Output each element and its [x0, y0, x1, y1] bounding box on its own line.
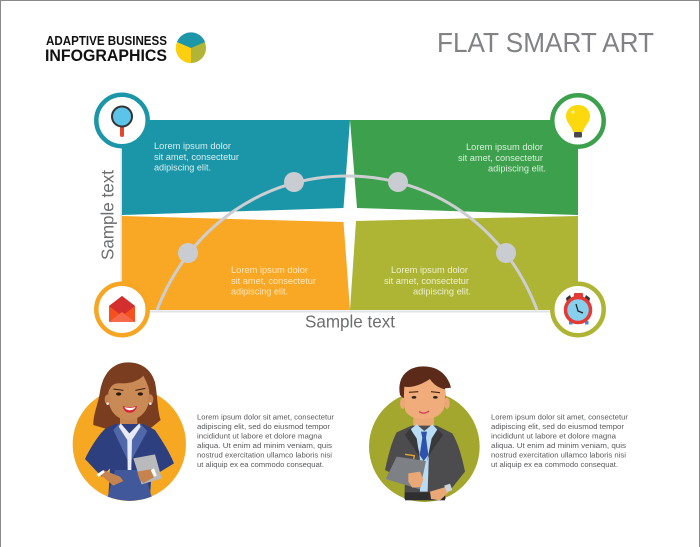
skirt: [108, 470, 152, 501]
text: teal quadrant: adipiscing elit.: [154, 162, 211, 172]
text: businesswoman paragraph: incididunt ut labore et dolore magna: [197, 432, 323, 440]
lapels: [113, 423, 128, 462]
hand on hip: [100, 470, 123, 486]
logo: adaptive business infographics: [45, 32, 206, 65]
text: businessman paragraph: ut aliquip ex ea commodo consequat.: [491, 460, 618, 469]
tie: [420, 432, 428, 461]
text: businessman paragraph: nostrud exercitation ullamco laboris nisi: [491, 450, 626, 460]
text: businesswoman paragraph: nostrud exercitation ullamco laboris nisi: [197, 450, 332, 460]
belt: [405, 492, 445, 500]
text: green quadrant: [458, 142, 546, 174]
text: olive quadrant: sit amet, consectetur: [384, 276, 469, 286]
text: olive quadrant: adipiscing elit.: [413, 286, 471, 296]
text: olive quadrant: [384, 265, 471, 296]
text: businesswoman paragraph: ut aliquip ex ea commodo consequat.: [197, 460, 324, 469]
text: green quadrant: Lorem ipsum dolor: [466, 142, 543, 152]
logo text: ADAPTIVE BUSINESS: [46, 34, 167, 48]
icon: magnifying glass: [96, 95, 148, 146]
text: orange quadrant: Lorem ipsum dolor: [231, 265, 308, 275]
text: businessman paragraph: adipiscing elit, sed do eiusmod tempor: [491, 422, 624, 431]
logo pie icon: [176, 32, 206, 63]
hand on tablet: [137, 469, 155, 483]
icon: alarm clock: [552, 284, 604, 335]
text: teal quadrant: [154, 141, 239, 172]
text: businesswoman paragraph: Lorem ipsum dolor sit amet, consectetur: [197, 412, 334, 422]
eyes: [116, 392, 121, 396]
text: teal quadrant: sit amet, consectetur: [154, 152, 239, 162]
panel: teal quadrant: [122, 120, 350, 215]
text: green quadrant: sit amet, consectetur: [458, 153, 543, 163]
icon: envelope: [96, 284, 148, 335]
text: businesswoman paragraph: aliqua. Ut enim ad minim veniam, quis: [197, 441, 332, 450]
hair: [93, 362, 161, 430]
face: [404, 379, 445, 419]
shirt: [119, 423, 141, 470]
text: teal quadrant: Lorem ipsum dolor: [154, 141, 231, 151]
tablet: [133, 454, 162, 484]
neck: [120, 412, 137, 437]
panel: green quadrant: [350, 120, 578, 215]
text: businessman paragraph: [491, 412, 628, 469]
text: businessman paragraph: Lorem ipsum dolor sit amet, consectetur: [491, 412, 628, 422]
title: FLAT SMART ART: [437, 27, 654, 58]
text: olive quadrant: Lorem ipsum dolor: [391, 265, 468, 275]
axis label: vertical: Sample text: [98, 170, 118, 260]
panel: olive quadrant: [350, 216, 578, 310]
text: businessman paragraph: aliqua. Ut enim ad minim veniam, quis: [491, 441, 626, 450]
hand on hip and watch: [430, 487, 448, 500]
jacket: [85, 424, 174, 497]
text: businessman paragraph: incididunt ut labore et dolore magna: [491, 432, 617, 440]
text: orange quadrant: adipiscing elit.: [231, 286, 288, 296]
text: green quadrant: adipiscing elit.: [488, 164, 546, 174]
jacket: [385, 426, 465, 499]
text: orange quadrant: sit amet, consectetur: [231, 276, 316, 286]
panel: orange quadrant: [122, 216, 350, 310]
hand on briefcase: [408, 472, 423, 488]
logo text: INFOGRAPHICS: [45, 47, 167, 65]
smile: [123, 406, 137, 413]
text: businesswoman paragraph: adipiscing elit, sed do eiusmod tempor: [197, 422, 330, 431]
text: orange quadrant: [231, 265, 316, 296]
logo text: [45, 34, 167, 65]
figure: businesswoman on orange circle: [73, 362, 186, 501]
icon: light bulb: [552, 95, 604, 147]
lapels: [405, 428, 420, 462]
text: businesswoman paragraph: [197, 412, 334, 469]
eyes: [412, 396, 416, 399]
axis lines: [122, 120, 578, 312]
briefcase: [386, 457, 426, 489]
neck: [413, 412, 434, 430]
chart: quadrant diagram with arc: [96, 95, 604, 335]
arc with nodes: [157, 172, 537, 310]
shirt: [411, 424, 438, 492]
face: [108, 376, 149, 420]
figure: businessman on olive circle: [369, 366, 480, 502]
smile: [419, 411, 429, 413]
hair back: [399, 366, 451, 398]
axis label: horizontal: Sample text: [305, 312, 395, 332]
